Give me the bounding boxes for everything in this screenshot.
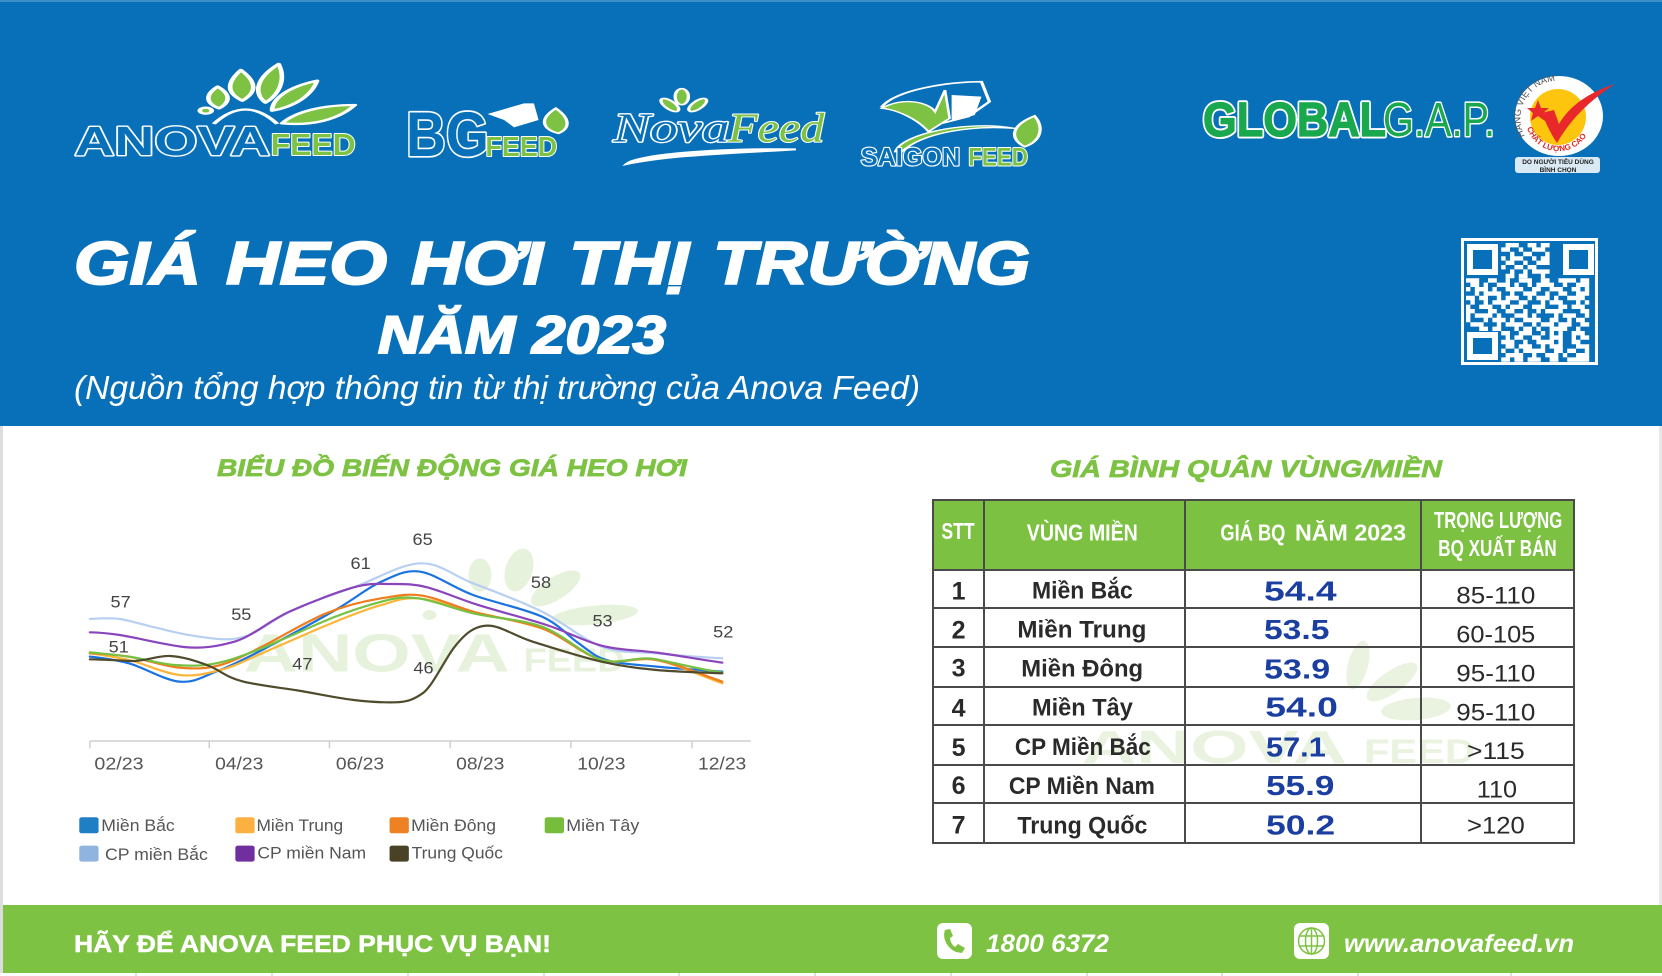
axis labels: 10/23 <box>577 753 625 773</box>
logo: BG Feed: BG <box>406 99 489 170</box>
weight column: >120 <box>1467 812 1525 839</box>
watermark: table <box>1082 638 1475 773</box>
logo: Nova Feed: Nova <box>613 105 730 151</box>
data labels: 65 <box>413 531 433 549</box>
STT column: 2 <box>952 616 966 644</box>
STT column <box>952 577 966 839</box>
region column: Miền Trung <box>1017 617 1146 644</box>
series lines <box>90 563 722 702</box>
line chart <box>79 531 751 864</box>
region column: Miền Tây <box>1032 695 1133 722</box>
watermark: table: FEED <box>1364 733 1475 771</box>
legend: Miền Đông <box>411 817 496 835</box>
STT column: 3 <box>952 655 966 683</box>
QR code <box>1462 240 1596 364</box>
logo: Anova Feed: FEED <box>271 128 356 162</box>
icon: globe <box>1294 923 1329 959</box>
logo: Anova Feed <box>74 64 356 164</box>
axis labels: 02/23 <box>94 753 144 773</box>
badge: Hàng Việt Nam chất lượng cao: CHẤT LƯỢNG CAO <box>1528 127 1586 152</box>
weight column: 95-110 <box>1456 700 1535 727</box>
subtitle: source note: (Nguồn tổng hợp thông tin từ thị trường của Anova Feed) <box>74 369 920 406</box>
price column: 54.4 <box>1264 576 1337 607</box>
logo: GlobalG.A.P.: G.A.P. <box>1383 94 1495 147</box>
table header: GIÁ BQ <box>1220 519 1285 546</box>
watermark: table: ANOVA <box>1082 721 1347 773</box>
title <box>74 230 1030 365</box>
price column: 54.0 <box>1265 692 1338 723</box>
title: THỊ <box>569 230 691 297</box>
watermark: chart: ANOVA <box>244 623 510 683</box>
region column: Trung Quốc <box>1017 812 1147 839</box>
badge: Hàng Việt Nam chất lượng cao: DO NGƯỜI TIÊU DÙNG <box>1522 157 1594 166</box>
table grid <box>933 500 1574 843</box>
table <box>933 500 1574 843</box>
data labels: 46 <box>413 659 434 677</box>
weight column: >115 <box>1467 738 1525 765</box>
data labels: 53 <box>592 613 613 631</box>
logo: BG Feed: FEED <box>486 131 557 162</box>
data labels: 55 <box>231 606 251 624</box>
title: HƠI <box>411 230 545 297</box>
logo: Nova Feed <box>613 89 824 164</box>
logo: GlobalG.A.P.: GLOBAL <box>1203 94 1386 147</box>
price column: 53.5 <box>1264 614 1329 645</box>
STT column: 4 <box>952 695 966 723</box>
axis labels: 08/23 <box>456 753 504 773</box>
table header: NĂM 2023 <box>1295 519 1406 546</box>
axis labels: 06/23 <box>336 753 384 773</box>
STT column: 6 <box>952 772 966 800</box>
data labels: 47 <box>292 655 312 673</box>
watermark: chart: FEED <box>524 643 625 679</box>
heading: chart: BIỂU ĐỒ BIẾN ĐỘNG GIÁ HEO HƠI <box>217 454 689 482</box>
region column: Miền Đông <box>1021 656 1143 683</box>
axis labels: 12/23 <box>698 753 746 773</box>
table header: TRỌNG LƯỢNG <box>1434 507 1562 533</box>
data labels: 51 <box>109 639 129 657</box>
title: NĂM 2023 <box>378 305 666 365</box>
logo: Anova Feed: ANOVA <box>74 118 270 164</box>
icon: phone <box>937 923 972 959</box>
table header <box>933 500 1574 570</box>
data labels: 52 <box>713 623 733 641</box>
watermark: chart <box>244 547 640 683</box>
weight column: 60-105 <box>1456 621 1535 648</box>
data labels: 61 <box>351 555 371 573</box>
badge: Hàng Việt Nam chất lượng cao: BÌNH CHỌN <box>1540 165 1577 174</box>
axis labels <box>94 753 746 773</box>
region column <box>1009 576 1155 839</box>
legend <box>79 816 639 864</box>
legend: Miền Trung <box>256 817 343 835</box>
legend: Miền Bắc <box>101 816 175 835</box>
axis labels: 04/23 <box>215 753 263 773</box>
table header: BQ XUẤT BÁN <box>1438 534 1557 561</box>
footer phone number: 1800 6372 <box>986 930 1109 958</box>
logo: GlobalG.A.P. <box>1203 94 1495 147</box>
heading: table: GIÁ BÌNH QUÂN VÙNG/MIỀN <box>1050 455 1443 483</box>
weight column: 95-110 <box>1456 661 1535 688</box>
badge: Hàng Việt Nam chất lượng cao <box>1513 74 1615 174</box>
weight column: 85-110 <box>1456 582 1535 609</box>
legend: CP miền Nam <box>257 844 366 862</box>
logo: Nova Feed: Feed <box>727 105 824 151</box>
price column: 57.1 <box>1266 732 1326 763</box>
table header: STT <box>941 518 975 544</box>
weight column <box>1456 582 1535 839</box>
axis <box>90 741 751 748</box>
table header: VÙNG MIỀN <box>1027 519 1138 546</box>
logo: Saigon Feed: SAIGON <box>861 144 960 171</box>
title: GIÁ <box>74 230 201 297</box>
header band <box>0 0 1662 426</box>
data labels: 57 <box>110 593 131 611</box>
legend: Trung Quốc <box>412 844 503 862</box>
region column: Miền Bắc <box>1032 576 1133 604</box>
STT column: 5 <box>952 734 966 762</box>
footer website: www.anovafeed.vn <box>1344 930 1574 958</box>
price column: 53.9 <box>1264 653 1330 684</box>
legend: CP miền Bắc <box>105 845 208 864</box>
STT column: 1 <box>952 577 966 605</box>
footer band <box>0 905 1662 976</box>
badge: Hàng Việt Nam chất lượng cao: HÀNG VIỆT NAM <box>1513 74 1554 138</box>
title: TRƯỜNG <box>713 230 1030 297</box>
data labels: 58 <box>531 574 551 592</box>
footer slogan: HÃY ĐỂ ANOVA FEED PHỤC VỤ BẠN! <box>74 930 551 958</box>
STT column: 7 <box>952 811 966 839</box>
logo: Saigon Feed: FEED <box>968 144 1028 171</box>
logo: Saigon Feed <box>861 82 1040 171</box>
logo: GlobalG.A.P.: GLOBAL <box>1203 94 1386 147</box>
price column: 50.2 <box>1266 809 1335 840</box>
price column <box>1264 576 1338 840</box>
region column: CP Miền Bắc <box>1015 733 1151 761</box>
title: HEO <box>226 230 387 297</box>
legend: Miền Tây <box>566 817 639 835</box>
price column: 55.9 <box>1266 770 1334 801</box>
region column: CP Miền Nam <box>1009 773 1155 800</box>
weight column: 110 <box>1477 776 1517 803</box>
data labels <box>109 531 733 677</box>
